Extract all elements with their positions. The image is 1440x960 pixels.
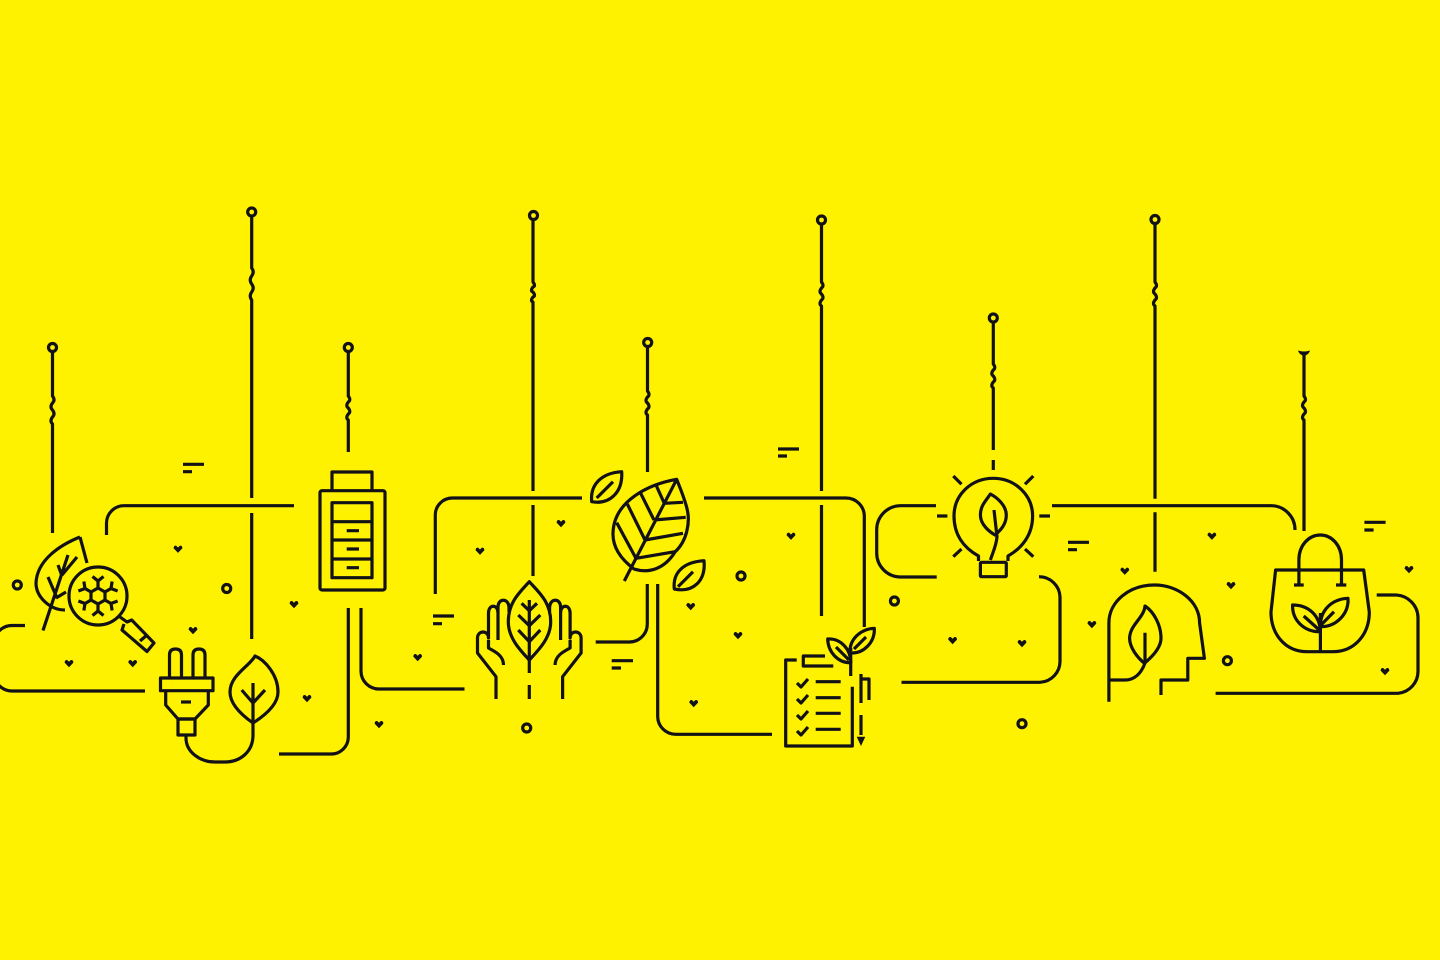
icon: shopping bag with sprout xyxy=(1271,535,1369,652)
decorative dots xyxy=(13,572,1231,732)
decorative dash pairs xyxy=(183,449,1386,668)
pin cap on bag line xyxy=(1298,350,1310,356)
icon: battery xyxy=(320,472,385,590)
icon: light bulb with leaf xyxy=(937,476,1050,577)
icon: head with leaf xyxy=(1109,585,1204,702)
icon: hands holding leaf xyxy=(478,582,581,699)
icon: cable and leaf xyxy=(186,656,278,762)
icon: plug xyxy=(160,649,213,735)
decorative hearts xyxy=(65,520,1413,728)
pin lines xyxy=(51,216,1306,639)
pin heads xyxy=(48,208,1159,352)
connectors xyxy=(0,498,1418,754)
icon: large leaf with two small leaves xyxy=(592,472,704,590)
icon: leaf under magnifier xyxy=(36,537,87,630)
icon: clipboard with sprout and pen xyxy=(786,628,874,746)
icon: magnifier with snowflake xyxy=(69,567,154,652)
